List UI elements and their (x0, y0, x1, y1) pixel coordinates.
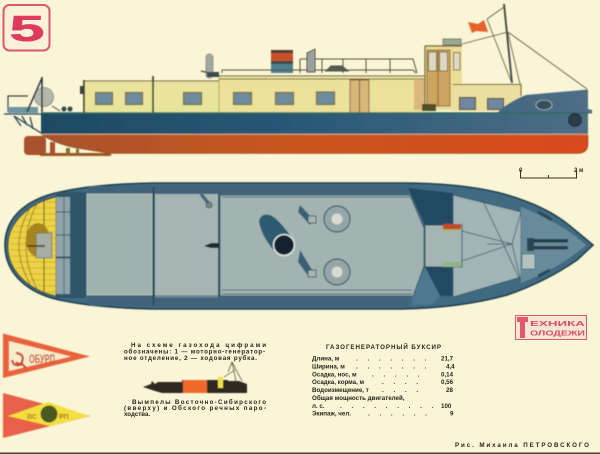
section 2 wheelhouse (218, 377, 223, 388)
table rows: Осадка, нос, м (312, 372, 357, 378)
table rows (312, 356, 455, 418)
wheelhouse (425, 39, 462, 110)
scale bar: 2 м (574, 168, 584, 174)
cabin door (350, 80, 369, 113)
table rows: Экипаж, чел. (312, 410, 351, 418)
rudder and keel (24, 136, 111, 156)
deckhouse (80, 76, 426, 114)
plan view of the tug (5, 183, 593, 309)
table rows: Осадка, корма, м (312, 379, 365, 386)
roof panel aft (87, 194, 152, 295)
table rows: Ширина, м (312, 364, 345, 370)
table rows: 9 (450, 410, 454, 418)
table rows: . . . . . . . (356, 364, 430, 370)
pennants caption: Вымпелы Восточно-Сибирского (132, 399, 266, 406)
pennant bottom: ВС (27, 414, 37, 421)
scale bar (519, 168, 584, 178)
roof railing (222, 49, 417, 73)
main roof panel (220, 195, 424, 296)
table rows: . . . . . . . . . (340, 403, 437, 410)
pennant bottom: РП (59, 414, 69, 421)
bottom edge (0, 452, 600, 454)
magazine logo: ОЛОДЕЖИ (530, 330, 585, 338)
small deck fittings (201, 194, 219, 248)
hull blue upper part (41, 90, 592, 134)
bow forepeak (521, 207, 586, 283)
wheelhouse roof (425, 224, 462, 267)
pennants caption: (вверху) и Обского речных паро- (124, 405, 266, 412)
side decks (88, 186, 408, 306)
scheme caption: На схеме газохода цифрами (131, 342, 266, 349)
round ventilators (298, 205, 350, 285)
number badge (4, 5, 50, 50)
pennant top: ОБУРП (29, 352, 55, 366)
table rows: 0,14 (441, 372, 454, 378)
roof panel middle (155, 194, 218, 297)
mast and rigging (462, 4, 587, 89)
funnel with shadow (259, 215, 294, 256)
specification table (312, 343, 455, 418)
hull red lower part (42, 135, 588, 154)
pennants caption: ходства. (124, 411, 150, 418)
pennants caption (124, 399, 266, 418)
table rows: 100 (441, 403, 452, 410)
scheme caption: обозначены: 1 — моторно-генератор- (124, 348, 265, 356)
deck gear near wheelhouse (422, 104, 436, 111)
windows (96, 92, 334, 104)
pennant bottom (3, 393, 90, 438)
table rows: Водоизмещение, т (312, 387, 369, 394)
table rows: . . . . . . (368, 410, 431, 418)
table rows: . . . . . (372, 372, 423, 378)
dark deck wells (56, 192, 86, 298)
table rows: . . . . . . . (356, 356, 430, 362)
table rows: Общая мощность двигателей, (312, 395, 405, 402)
side view of the tug (4, 4, 592, 156)
bow deck (453, 195, 521, 297)
bow rigging lines (462, 199, 521, 280)
table rows: . . . . (382, 379, 422, 386)
ventilator and funnel (201, 50, 293, 78)
table rows: л. с. (312, 403, 325, 410)
magazine logo (516, 316, 586, 340)
bow winch (522, 212, 568, 276)
table title: ГАЗОГЕНЕРАТОРНЫЙ БУКСИР (326, 343, 441, 351)
stern platform with tank (4, 77, 72, 133)
scale bar: 0 (519, 168, 523, 174)
table rows: 0,56 (441, 379, 454, 386)
stern gangway (56, 196, 70, 296)
mini ship scheme (143, 362, 247, 393)
scheme caption (124, 342, 266, 362)
pennant top (3, 334, 90, 378)
roof seam lines (88, 187, 412, 306)
hull details (41, 100, 588, 134)
table rows: Длина, м (312, 356, 340, 362)
section 1 engine room (183, 380, 207, 393)
forward cabin (453, 84, 521, 111)
hull outline (5, 183, 593, 309)
hammer and sickle (12, 353, 26, 368)
magazine logo: ЕХНИКА (530, 321, 585, 328)
illustrator credit: Рис. Михаила ПЕТРОВСКОГО (455, 442, 589, 449)
table rows: 21,7 (441, 356, 454, 362)
scheme caption: ное отделение, 2 — ходовая рубка. (124, 355, 257, 362)
number badge: 5 (10, 9, 45, 49)
table rows: . . . . (382, 387, 422, 394)
table rows: 28 (446, 387, 453, 394)
flag (468, 20, 488, 33)
stern yellow deck (8, 197, 56, 296)
table rows: 4,4 (446, 364, 455, 370)
